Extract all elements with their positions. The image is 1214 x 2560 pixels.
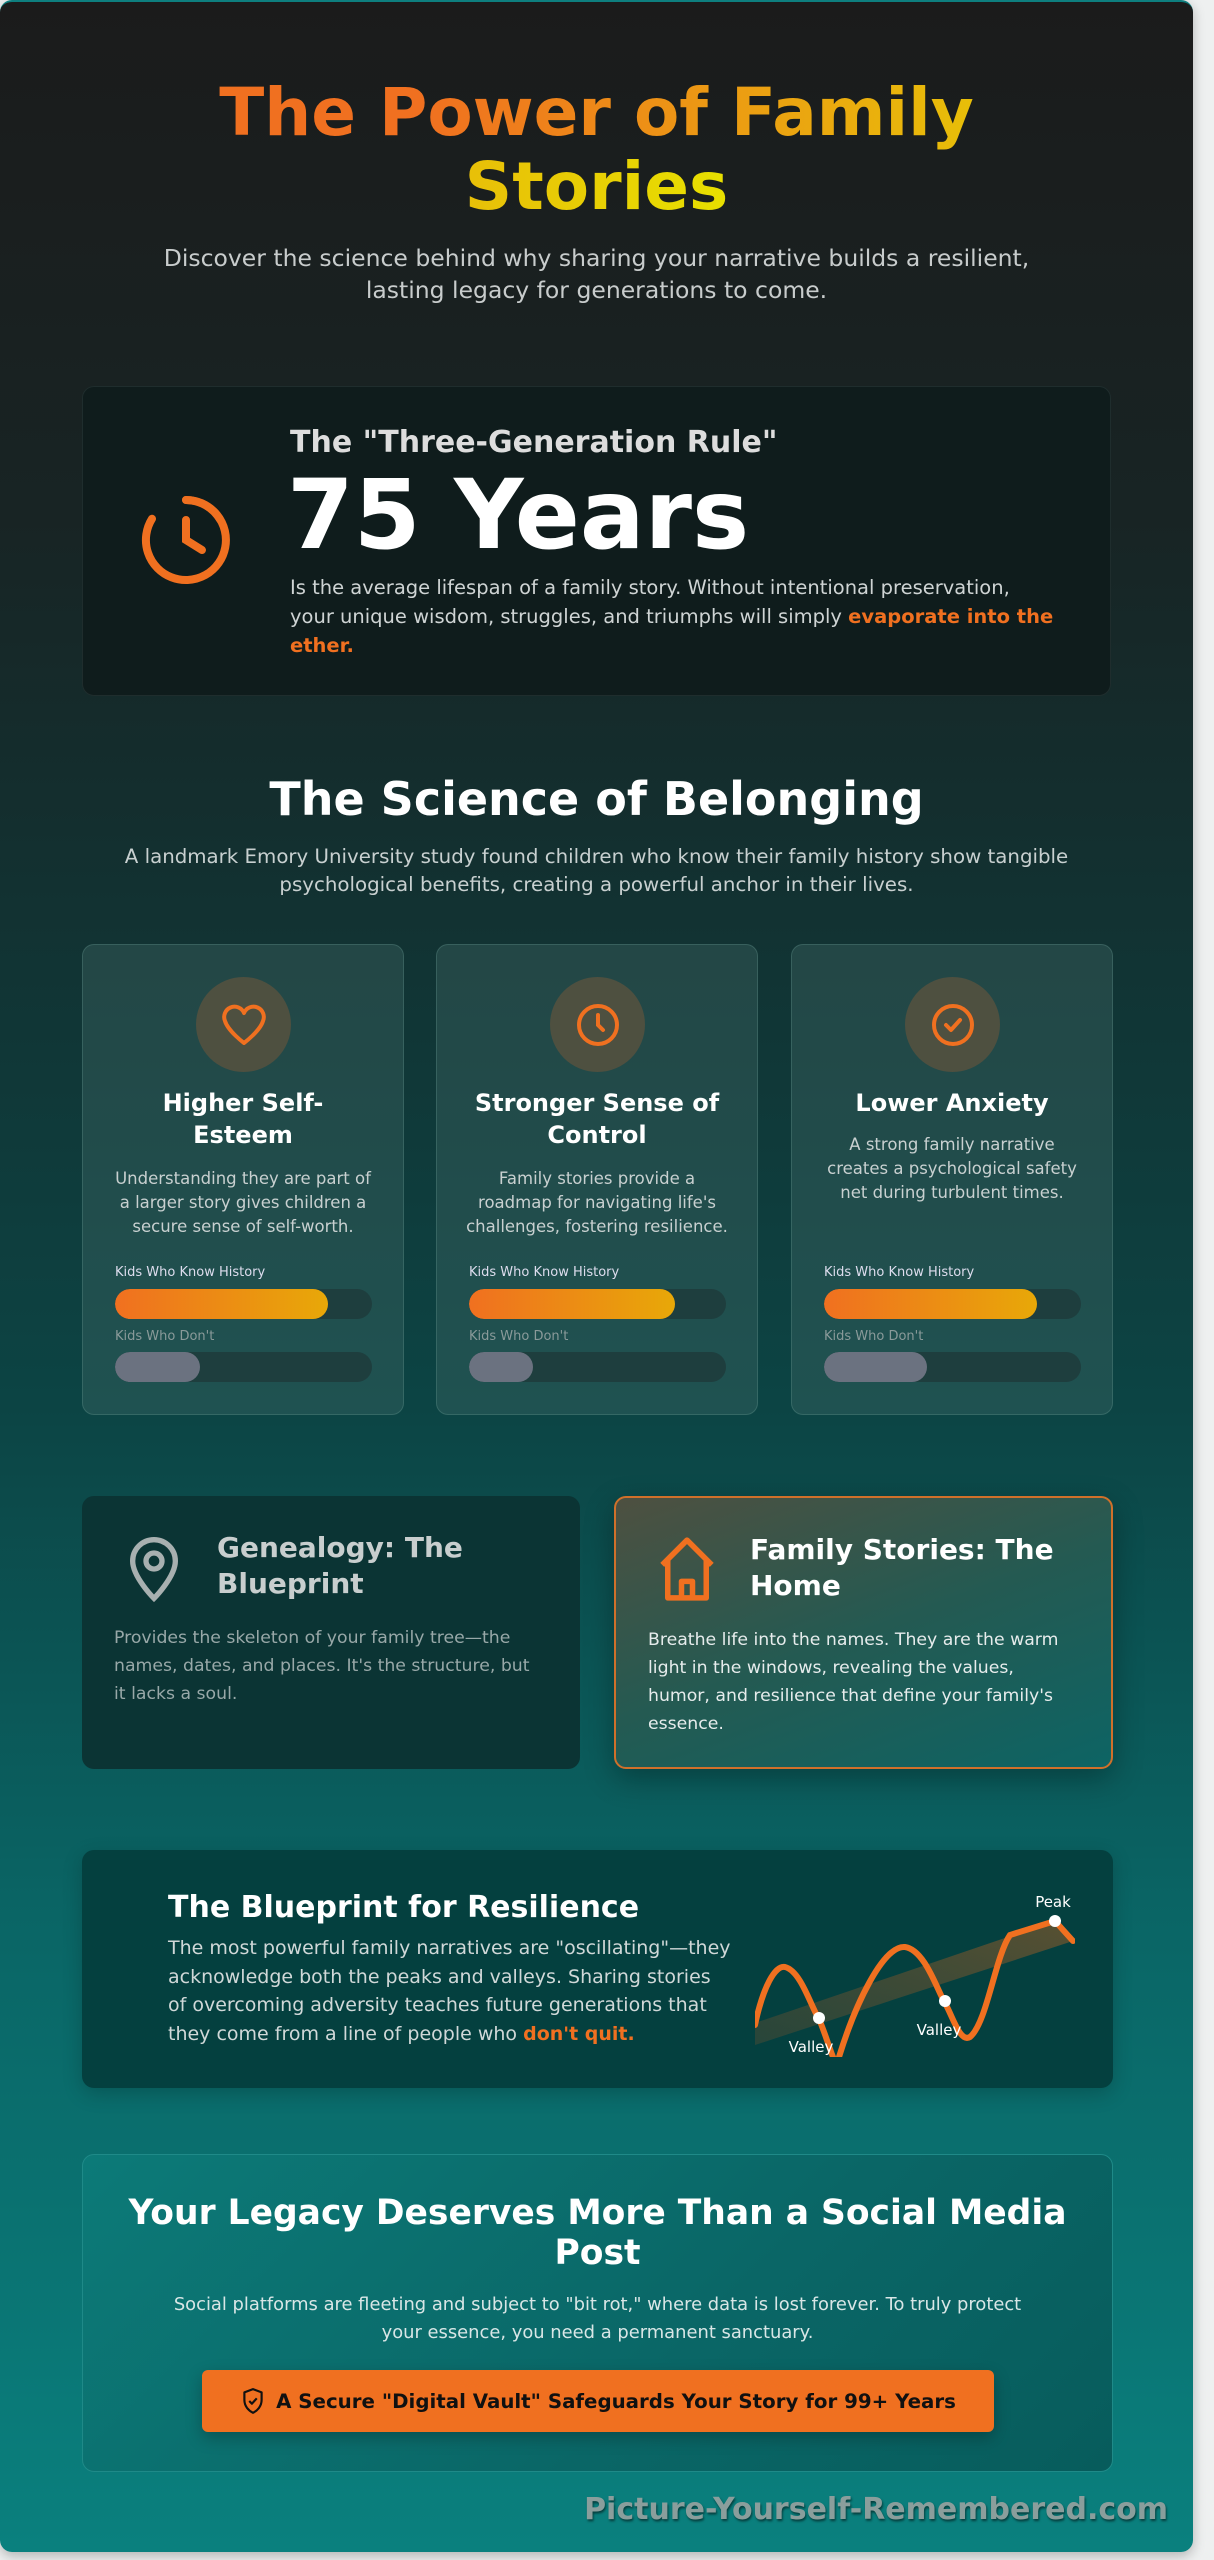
text: Social platforms are fleeting and subject to "bit rot," where data is lost forever. To truly protect [174,2294,1021,2315]
text: it lacks a soul. [114,1684,237,1704]
bars: Kids Who Don't [469,1329,568,1344]
icon: map pin [130,1537,178,1602]
subtitle: Discover the science behind why sharing your narrative builds a resilient, [164,244,1029,272]
heading: Genealogy: The [217,1531,463,1564]
heading: Your Legacy Deserves More Than a Social Media [128,2193,1066,2233]
icon: shield [243,2388,263,2414]
heading: The Blueprint for Resilience [168,1890,639,1925]
panel: sense of control [436,944,758,1415]
icon: heart [196,977,291,1072]
subtitle: lasting legacy for generations to come. [366,276,827,304]
text [168,1937,731,2044]
text: Breathe life into the names. They are the warm [648,1630,1058,1650]
panel: self-esteem [82,944,404,1415]
bars: Kids Who Don't [824,1329,923,1344]
button: A Secure "Digital Vault" Safeguards Your Story for 99+ Years [276,2390,956,2412]
text [114,1628,530,1704]
bars: Kids Who Know History [469,1265,619,1280]
card title [475,1089,720,1149]
title: Stories [465,148,728,225]
icon: clock [550,977,645,1072]
text: lifespan [290,576,1053,657]
icon: clock [142,496,230,584]
card title [163,1089,323,1149]
heading: Home [750,1569,841,1602]
heading: Post [554,2233,640,2273]
card title: Higher Self- [163,1089,323,1117]
card text: Understanding they are part of a larger story gives children a secure sense of self-worth. [115,1169,371,1236]
text: acknowledge both the peaks and valleys. Sharing stories [168,1966,711,1988]
text: lifespan: your unique wisdom, struggles, and triumphs will simply evaporate into the ether. [290,605,1053,657]
heading: science of belonging: The Science of Belonging [269,772,924,826]
panel: legacy CTA [82,2154,1113,2472]
button [202,2370,994,2432]
card title: Control [547,1121,647,1149]
title [219,74,974,225]
bars [115,1265,372,1382]
title: The Power of Family [219,74,974,151]
stat: 75 years: 75 Years [287,459,749,571]
bars: Kids Who Know History [824,1265,974,1280]
panel: three-generation rule [82,386,1111,696]
heading [217,1531,463,1600]
panel: blueprint for resilience [82,1850,1113,2088]
text [174,2294,1021,2343]
card title: Stronger Sense of [475,1089,719,1117]
heading: three-generation rule: The "Three-Generation Rule" [290,425,777,460]
text: emory study: psychological benefits, creating a powerful anchor in their lives. [279,873,914,896]
panel: lower anxiety [791,944,1113,1415]
heading: Blueprint [217,1567,364,1600]
chart: oscillating wave: Valley [917,2021,961,2039]
text: they come from a line of people who don't quit. [168,2022,635,2044]
bars: Kids Who Know History [115,1265,265,1280]
bars [469,1265,726,1382]
icon: house [660,1537,714,1601]
text: your essence, you need a permanent sanctuary. [382,2322,813,2343]
text: emory study: A landmark Emory University study found children who know their family history show tangible [125,845,1068,868]
chart: oscillating wave [755,1895,1075,2057]
bars: Kids Who Don't [115,1329,214,1344]
text: The most powerful family narratives are "oscillating"—they [168,1937,731,1959]
watermark: Picture-Yourself-Remembered.com [584,2492,1168,2527]
chart: oscillating wave: Valley [789,2038,833,2056]
text: lifespan: Is the average lifespan of a family story. Without intentional preservation, [290,576,1010,599]
card title: Lower Anxiety [855,1089,1049,1117]
heading [128,2193,1066,2273]
text: essence. [648,1714,724,1734]
text [648,1630,1058,1734]
subtitle [164,244,1029,304]
bars [824,1265,1081,1382]
text: Provides the skeleton of your family tree—the [114,1628,510,1648]
panel: genealogy [82,1496,580,1769]
panel: family stories home [614,1496,1113,1769]
heading: Family Stories: The [750,1533,1054,1566]
text: humor, and resilience that define your family's [648,1686,1053,1706]
text: light in the windows, revealing the values, [648,1658,1014,1678]
card text: Family stories provide a roadmap for navigating life's challenges, fostering resilience. [466,1169,728,1236]
icon: check circle [905,977,1000,1072]
card text: A strong family narrative creates a psychological safety net during turbulent times. [827,1135,1077,1202]
heading [750,1533,1054,1602]
text: emory study [125,845,1068,896]
text: names, dates, and places. It's the structure, but [114,1656,530,1676]
text: of overcoming adversity teaches future generations that [168,1994,707,2016]
card title: Esteem [193,1121,293,1149]
